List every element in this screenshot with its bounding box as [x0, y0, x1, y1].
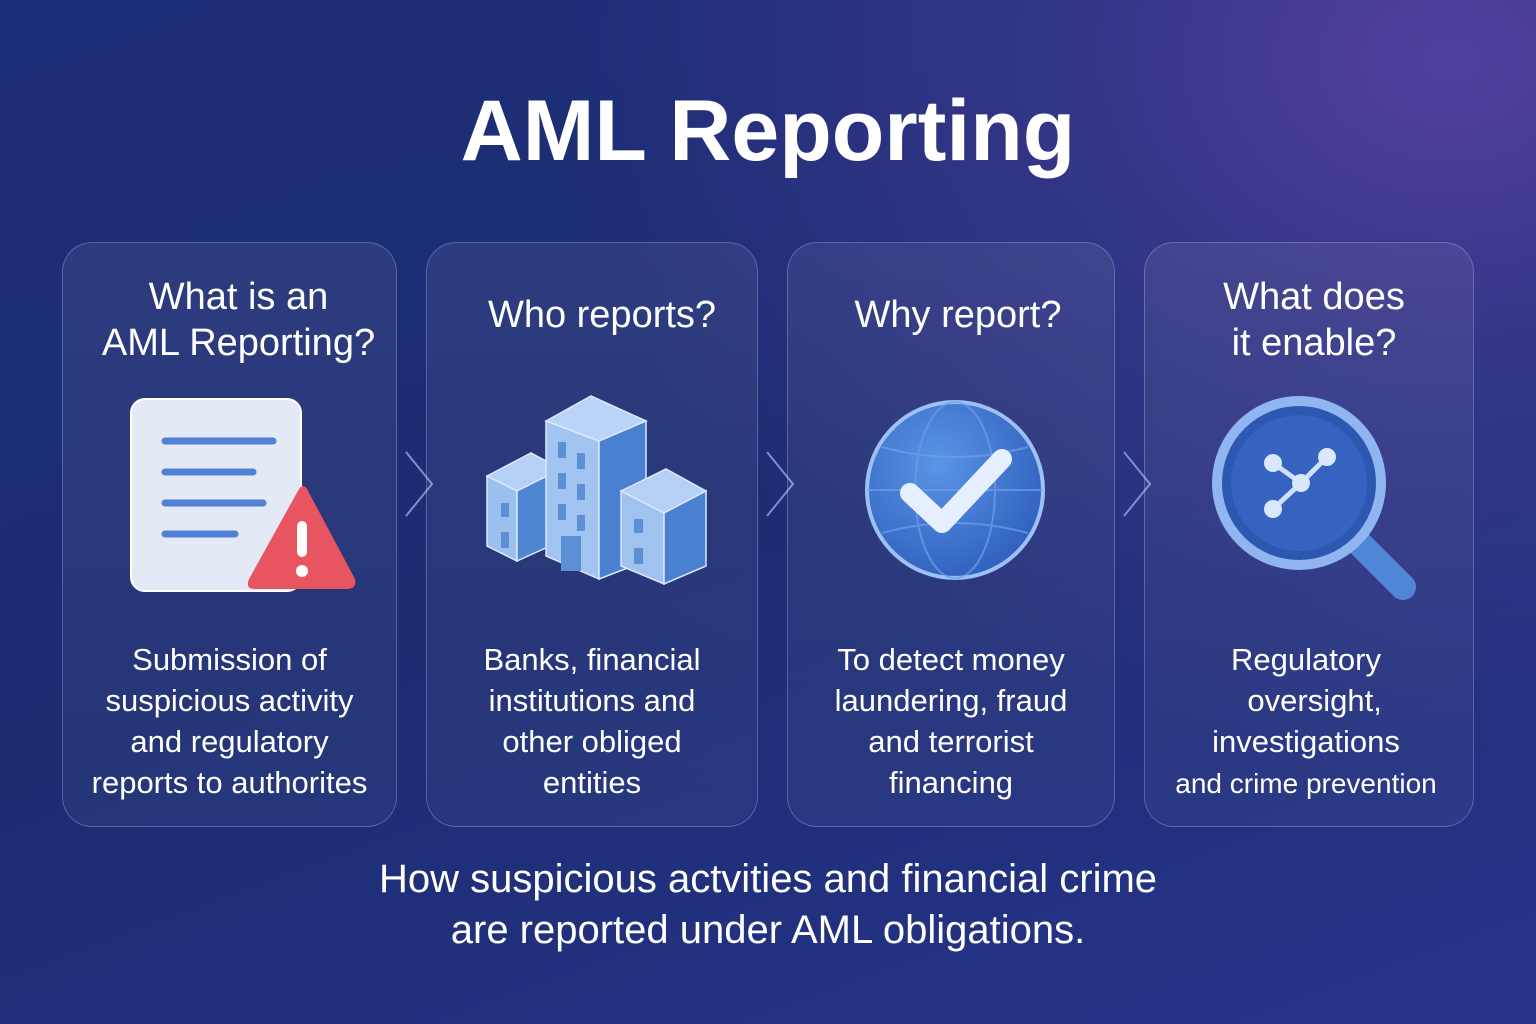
body: and terrorist: [868, 724, 1034, 759]
body: and crime prevention: [1175, 768, 1437, 799]
body: laundering, fraud: [835, 683, 1067, 718]
body: [92, 642, 367, 800]
heading: [1223, 276, 1405, 364]
title: AML Reporting: [461, 83, 1075, 179]
panel: what is: [62, 242, 397, 827]
body: other obliged: [502, 724, 682, 759]
body: [483, 642, 701, 800]
body: To detect money: [837, 642, 1065, 677]
body: Banks, financial: [483, 642, 701, 677]
icon: magnifier network: [1212, 396, 1416, 600]
icon: buildings: [486, 395, 708, 586]
panel: who: [426, 242, 758, 827]
heading: Why report?: [855, 294, 1061, 336]
body: oversight,: [1247, 683, 1382, 718]
body: Submission of: [132, 642, 327, 677]
heading: AML Reporting?: [102, 322, 375, 364]
footer caption: are reported under AML obligations.: [451, 908, 1085, 952]
body: financing: [889, 765, 1013, 800]
body: Regulatory: [1231, 642, 1381, 677]
arrow 2: [766, 452, 794, 516]
icon: document with warning: [130, 398, 356, 592]
icon: globe check: [865, 400, 1045, 580]
heading: Who reports?: [488, 294, 716, 336]
panel: why: [787, 242, 1115, 827]
body: [835, 642, 1067, 800]
body: [1175, 642, 1437, 799]
heading: What does: [1223, 276, 1405, 318]
body: suspicious activity: [105, 683, 354, 718]
body: investigations: [1212, 724, 1400, 759]
panel: enable: [1144, 242, 1474, 827]
heading: What is an: [149, 276, 328, 318]
body: reports to authorites: [92, 765, 367, 800]
body: and regulatory: [130, 724, 329, 759]
footer caption: [379, 857, 1157, 952]
arrow 3: [1123, 452, 1152, 516]
heading: it enable?: [1232, 322, 1396, 364]
body: institutions and: [489, 683, 695, 718]
arrow 1: [405, 452, 434, 516]
footer caption: How suspicious actvities and financial crime: [379, 857, 1157, 901]
heading: [102, 276, 375, 364]
body: entities: [543, 765, 641, 800]
